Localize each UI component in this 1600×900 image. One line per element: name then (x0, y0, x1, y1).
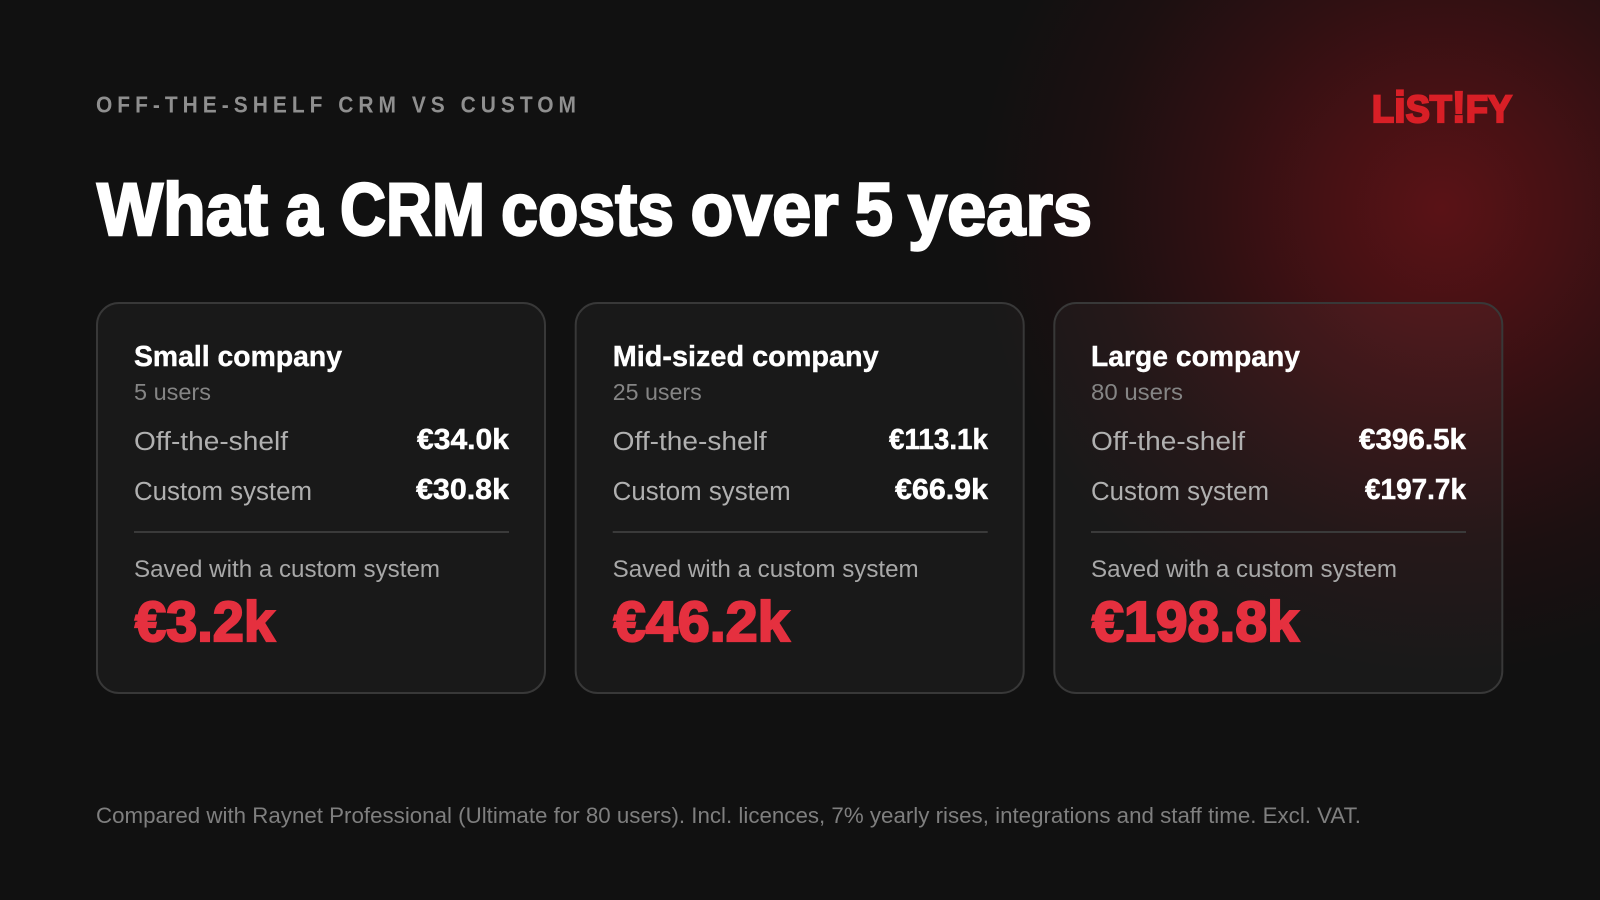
panel: small company (97, 303, 545, 693)
value: off-the-shelf: €34.0k (417, 424, 510, 456)
label: custom system: Custom system (1091, 478, 1269, 506)
title: years (908, 168, 1092, 251)
title: over (690, 168, 838, 251)
label: custom system: Custom system (613, 478, 791, 506)
heading: mid-sized company: Mid-sized company (613, 341, 879, 373)
label: off-the-shelf: Off-the-shelf (1091, 428, 1246, 456)
savings value: €46.2k (614, 590, 790, 654)
users: small company: 5 users (134, 379, 211, 405)
users: large company: 80 users (1091, 379, 1183, 405)
value: custom system: €30.8k (416, 474, 510, 506)
users: mid-sized company: 25 users (613, 379, 702, 405)
label: custom system: Custom system (134, 478, 312, 506)
savings value: €198.8k (1092, 590, 1299, 654)
label: off-the-shelf: Off-the-shelf (613, 428, 768, 456)
value: off-the-shelf: €113.1k (889, 424, 989, 456)
savings value: €3.2k (135, 590, 275, 654)
panel: large company (1054, 303, 1502, 693)
title: 5 (855, 168, 893, 251)
title: CRM (340, 168, 485, 251)
eyebrow: OFF-THE-SHELF CRM VS CUSTOM (96, 92, 581, 118)
value: custom system: €197.7k (1365, 474, 1467, 506)
title: a (286, 168, 323, 251)
logo: LiST!FY (1372, 83, 1512, 132)
savings label: Saved with a custom system (1091, 556, 1397, 583)
savings label: Saved with a custom system (613, 556, 919, 583)
title (97, 168, 1092, 251)
heading: small company: Small company (134, 341, 342, 373)
heading: large company: Large company (1091, 341, 1300, 373)
panel: mid-sized company (576, 303, 1024, 693)
title: costs (501, 168, 674, 251)
value: off-the-shelf: €396.5k (1359, 424, 1467, 456)
label: off-the-shelf: Off-the-shelf (134, 428, 289, 456)
footnote: Compared with Raynet Professional (Ultimate for 80 users). Incl. licences, 7% yearly rises, integrations and staff time. Excl. VAT. (96, 803, 1361, 828)
value: custom system: €66.9k (895, 474, 989, 506)
savings label: Saved with a custom system (134, 556, 440, 583)
title: What (97, 168, 268, 251)
